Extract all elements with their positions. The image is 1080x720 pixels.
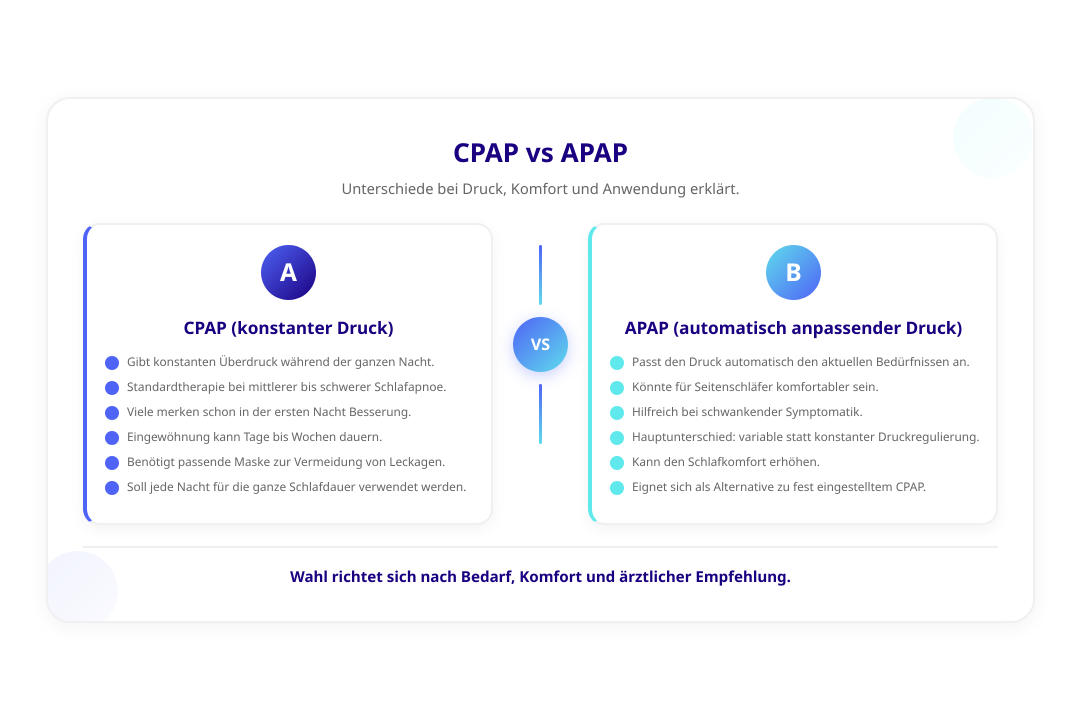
bullet list B: Hilfreich bei schwankender Symptomatik. bbox=[632, 404, 863, 420]
decorative circle: top right bbox=[953, 98, 1033, 178]
badge A bbox=[261, 245, 316, 300]
panel: APAP bbox=[588, 223, 998, 525]
bullet list A: Viele merken schon in der ersten Nacht Besserung. bbox=[127, 404, 411, 420]
VS badge: VS bbox=[531, 333, 550, 355]
subtitle: Unterschiede bei Druck, Komfort und Anwendung erklärt. bbox=[341, 179, 740, 199]
main card bbox=[46, 97, 1035, 623]
panel: CPAP bbox=[83, 223, 493, 525]
bullet list B: Passt den Druck automatisch den aktuellen Bedürfnissen an. bbox=[632, 354, 970, 370]
badge B bbox=[766, 245, 821, 300]
heading APAP: APAP (automatisch anpassender Druck) bbox=[625, 317, 962, 340]
bullet list A: Standardtherapie bei mittlerer bis schwerer Schlafapnoe. bbox=[127, 379, 447, 395]
bullet list A bbox=[105, 354, 466, 495]
divider line bottom bbox=[539, 384, 542, 444]
badge A: A bbox=[280, 256, 297, 289]
divider line top bbox=[539, 245, 542, 305]
bullet list A: Benötigt passende Maske zur Vermeidung von Leckagen. bbox=[127, 454, 445, 470]
bullet list B: Kann den Schlafkomfort erhöhen. bbox=[632, 454, 820, 470]
bullet list A: Soll jede Nacht für die ganze Schlafdauer verwendet werden. bbox=[127, 479, 466, 495]
decorative circle: bottom left bbox=[38, 551, 118, 631]
VS badge bbox=[513, 317, 568, 372]
bullet list B: Könnte für Seitenschläfer komfortabler sein. bbox=[632, 379, 879, 395]
footer conclusion: Wahl richtet sich nach Bedarf, Komfort und ärztlicher Empfehlung. bbox=[290, 567, 791, 587]
bullet list A: Gibt konstanten Überdruck während der ganzen Nacht. bbox=[127, 354, 434, 370]
bullet list B bbox=[610, 354, 980, 495]
bullet list B: Eignet sich als Alternative zu fest eingestelltem CPAP. bbox=[632, 479, 926, 495]
heading CPAP: CPAP (konstanter Druck) bbox=[184, 317, 393, 340]
title: CPAP vs APAP bbox=[453, 134, 628, 170]
badge B: B bbox=[785, 256, 802, 289]
bullet list B: Hauptunterschied: variable statt konstanter Druckregulierung. bbox=[632, 429, 980, 445]
bullet list A: Eingewöhnung kann Tage bis Wochen dauern. bbox=[127, 429, 382, 445]
